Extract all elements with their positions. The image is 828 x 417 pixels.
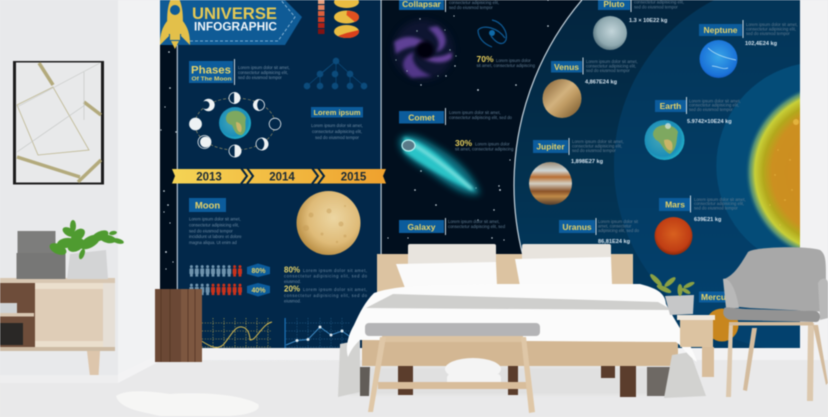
stat 70%: 70%: [476, 54, 494, 64]
comet heading tag: [399, 108, 446, 125]
collapsar heading tag: [399, 0, 446, 12]
galaxy description: Lorem ipsum dolor sit amet,: [448, 219, 500, 224]
badge 40%: 40%: [251, 288, 266, 294]
earth label: 5.9742×10E24 kg: [687, 119, 732, 125]
planet: neptune: [700, 40, 738, 78]
timeline ribbon: 2014: [269, 172, 295, 184]
phases of the moon heading: [189, 59, 235, 85]
uranus label: Uranus: [562, 222, 592, 232]
badge 80%: 80%: [251, 268, 266, 275]
pluto label: sed do eiusmod tempor: [634, 4, 678, 10]
icon: earth: [219, 107, 251, 139]
lorem ipsum tag: Lorem ipsum: [313, 108, 361, 117]
stat 80% text: eiusmod.: [284, 279, 301, 284]
neptune label: sed do eiusmod tempor: [746, 31, 790, 36]
venus label: [551, 58, 638, 86]
comet description: Lorem ipsum dolor sit amet,: [449, 110, 501, 115]
stat 20% text: [284, 284, 368, 304]
planet: mercury: [706, 308, 738, 342]
stat 80% text: consectetur adipisicing elit, sed do: [284, 274, 368, 278]
neptune label: 102,4E24 kg: [745, 41, 778, 47]
bed base: [362, 338, 678, 366]
line chart: blue data points: [284, 318, 352, 348]
comet heading tag: Comet: [408, 112, 435, 122]
mars label: [659, 196, 746, 223]
uranus label: 86,81E24 kg: [598, 239, 631, 245]
stat 30%: Lorem ipsum dolor: [475, 142, 510, 146]
stat 70%: Lorem ipsum dolor: [496, 58, 531, 63]
title banner: [160, 0, 302, 45]
mural: universe infographic: [160, 0, 800, 348]
people chart row 80%: [189, 265, 242, 277]
mars label: sed do eiusmod tempor: [694, 206, 738, 210]
comet: [399, 135, 480, 195]
floor: [0, 345, 828, 417]
stat 20% text: Lorem ipsum dolor sit amet,: [303, 287, 367, 292]
icon: network tree: [304, 58, 367, 89]
planet: pluto: [593, 16, 627, 50]
venus label: sed do eiusmod tempor: [586, 68, 630, 73]
pluto label: [598, 0, 684, 24]
pillows: [396, 257, 612, 288]
venus label: 4,867E24 kg: [585, 80, 618, 86]
lorem ipsum description: Lorem ipsum dolor sit amet,: [311, 123, 363, 128]
bed: [338, 244, 706, 398]
venus label: Lorem ipsum dolor sit amet,: [586, 59, 638, 64]
bar column chart: [318, 0, 324, 34]
timeline ribbon: 2015: [341, 172, 367, 184]
planet: venus: [542, 79, 582, 118]
jupiter label: [533, 138, 624, 165]
star field: [160, 0, 549, 270]
sun: [745, 89, 800, 255]
phases of the moon heading: Of The Moon: [192, 76, 232, 82]
mars label: 639E21 kg: [694, 217, 722, 223]
concentric orbit circles: [514, 0, 800, 348]
jupiter label: Lorem ipsum dolor sit amet,: [572, 139, 624, 144]
title: universe: UNIVERSE: [192, 5, 277, 23]
potted plant: [48, 220, 124, 279]
moon heading tag: [189, 198, 226, 212]
duvet: [347, 284, 697, 362]
moon description text: incididunt ut labore et dolore: [189, 234, 242, 239]
mars label: Lorem ipsum dolor sit amet,: [694, 197, 746, 202]
line chart: yellow curve: [200, 318, 272, 348]
planet: jupiter: [529, 162, 572, 205]
pluto label: 1.3 × 10E22 kg: [629, 18, 668, 24]
bed legs: [398, 364, 636, 397]
jupiter label: 1,898E27 kg: [571, 159, 604, 165]
timeline ribbon: [172, 168, 386, 184]
title: infographic: INFOGRAPHIC: [194, 22, 277, 34]
neptune label: consectetur adipisicing elit,: [746, 26, 796, 32]
stat 20% text: eiusmod.: [284, 298, 301, 304]
collapsar description: sed do eiusmod tempor: [449, 5, 493, 10]
timeline ribbon: 2013: [196, 172, 222, 184]
earth label: [655, 97, 741, 125]
bench: [365, 323, 540, 413]
nightstand: [677, 315, 715, 377]
jupiter label: sed do eiusmod tempor: [572, 148, 616, 153]
earth label: sed do eiusmod tempor: [689, 107, 733, 112]
headboard: [377, 254, 633, 294]
moon phases diagram: [190, 92, 281, 157]
grey throw: [366, 294, 672, 310]
neptune label: [699, 20, 798, 47]
towels: [445, 358, 501, 386]
people chart row 40%: [189, 284, 242, 295]
phases description text: Lorem ipsum dolor sit amet,: [238, 65, 290, 70]
stat 30%: 30%: [455, 138, 472, 148]
armchair: [723, 247, 828, 401]
galaxy heading tag: Galaxy: [408, 222, 436, 232]
badge 80%: [247, 264, 270, 277]
phases description text: sed do eiusmod tempor: [238, 75, 282, 80]
stacked pie charts: [334, 0, 359, 38]
uranus label: amet, consectetur: [598, 224, 632, 228]
moon description text: magna aliqua. Ut enim ad: [189, 240, 237, 245]
stat 70%: [476, 54, 536, 68]
black hole galaxy: [393, 20, 457, 80]
back cushions: [408, 244, 611, 266]
icon: orbit: [478, 20, 506, 47]
moon description text: consectetur adipisicing elit,: [189, 222, 239, 228]
galaxy description: consectetur adipiscing elit, sed: [448, 224, 506, 229]
mars label: Mars: [665, 200, 685, 210]
stat 80% text: Lorem ipsum dolor sit amet,: [303, 268, 367, 273]
phases description text: consectetur adipisicing elit,: [238, 70, 288, 75]
jupiter label: Jupiter: [536, 142, 565, 152]
stat 80% text: 80%: [284, 266, 300, 274]
planet: earth: [644, 120, 684, 160]
earth label: Earth: [660, 101, 681, 111]
uranus label: adipisicing elit, sed do: [598, 228, 640, 233]
lorem ipsum description: sed do eiusmod tempor: [315, 135, 359, 140]
badge 40%: [247, 283, 270, 296]
planet: mars: [654, 217, 692, 255]
mars label: consectetur adipisicing elit,: [694, 201, 744, 206]
earth label: consectetur adipisicing elit,: [689, 102, 739, 108]
galaxy heading tag: [399, 218, 446, 235]
side drapes: [338, 340, 706, 398]
stat 70%: sit amet, consectetur adipiscing: [476, 63, 536, 68]
moon description text: sed do eiusmod tempor: [189, 228, 233, 234]
uranus label: Lorem ipsum dolor sit: [598, 219, 639, 224]
comet description: consectetur adipiscing elit, sed do: [449, 115, 513, 120]
stat 20% text: 20%: [284, 284, 300, 294]
neptune label: Neptune: [704, 25, 738, 35]
sideboard: [0, 278, 115, 385]
stat 30%: [455, 138, 514, 152]
icon: rocket: [160, 0, 190, 49]
picture frame: [13, 61, 104, 184]
rug: [116, 391, 259, 416]
uranus label: [559, 218, 640, 245]
moon description text: Lorem ipsum dolor sit amet,: [189, 216, 241, 222]
venus label: Venus: [554, 62, 579, 72]
jupiter label: consectetur adipisicing elit,: [572, 144, 622, 148]
left navy panel: [177, 0, 382, 348]
wooden stump table: [155, 289, 202, 362]
storage boxes: [16, 231, 66, 279]
stat 20% text: consectetur adipisicing elit, sed do: [284, 293, 368, 298]
small plant on nightstand: [649, 273, 695, 315]
venus label: consectetur adipisicing elit,: [586, 64, 636, 68]
stat 30%: sit amet, consectetur adipiscing: [455, 146, 514, 152]
lorem ipsum description: consectetur adipisicing elit,: [312, 129, 362, 134]
collapsar description: consectetur adipisicing elit,: [449, 0, 499, 5]
moon heading tag: Moon: [195, 200, 220, 212]
earth label: Lorem ipsum dolor sit amet,: [689, 98, 741, 104]
phases of the moon heading: Phases: [191, 64, 231, 76]
moon planet: [296, 191, 360, 255]
neptune label: Lorem ipsum dolor sit amet,: [746, 22, 798, 27]
stat 80% text: [284, 266, 368, 284]
mercury label: Mercury: [701, 292, 734, 302]
